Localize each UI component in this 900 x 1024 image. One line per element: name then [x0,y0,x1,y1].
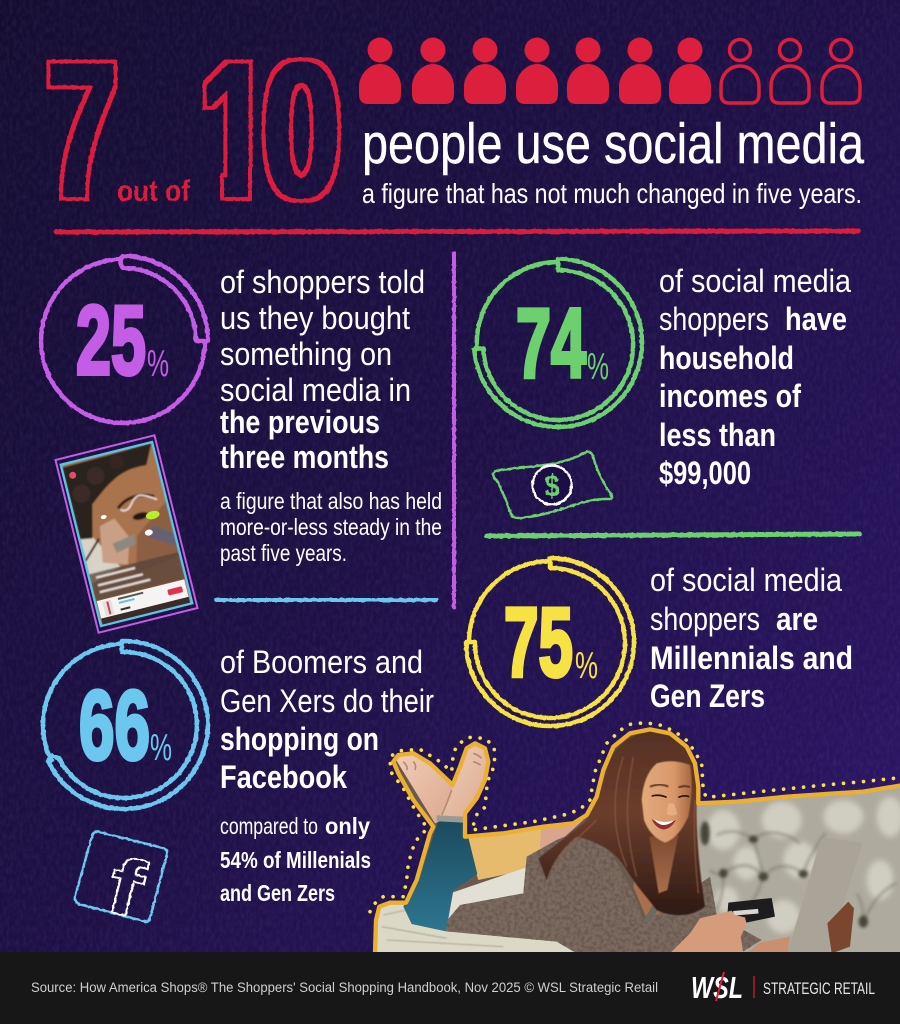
text: steady figure note [220,488,442,566]
legs: jeans [403,820,477,931]
text: household incomes: incomes of [659,378,801,414]
sofa [696,788,900,952]
donut: 66 percent [43,641,208,809]
text: Millennials and Gen Zers: are [776,601,818,637]
text: Boomers and Gen Xers: shopping on [220,721,379,757]
text: comparison note: compared to [220,813,318,839]
text: household incomes: $99,000 [659,455,751,491]
text: Millennials and Gen Zers: of social media [650,562,842,598]
neck skin [649,835,678,893]
text: steady figure note: a figure that also has held [220,488,442,514]
value: 75%: 75 [504,587,573,697]
text: comparison note: and Gen Zers [220,880,335,906]
donut: 25 percent [41,256,208,423]
source line: Source: How America Shops® The Shoppers' Social Shopping Handbook, Nov 2025 © WSL Strategic Retail [31,980,658,995]
icon: dollar bill: $ [544,468,560,503]
panel: 75 percent [466,558,853,726]
decoration: yellow dotted outline [370,723,900,912]
text: shoppers bought: social media in [220,372,411,408]
out of label: out of [117,175,191,208]
text: comparison note: only [325,813,370,839]
text: steady figure note: past five years. [220,540,347,566]
donut: 75 percent [466,558,634,726]
value: 75%: % [575,645,598,687]
donut: 74 percent [474,259,642,427]
value: 66%: % [150,727,172,769]
text: household incomes: of social media [659,263,851,299]
logo: WSL Strategic Retail: WSL [691,970,743,1005]
text: comparison note [220,813,371,906]
tablet [793,838,824,935]
icon: Facebook logo: f [99,841,153,935]
text: comparison note: 54% of Millenials [220,847,371,873]
text: household incomes: shoppers [659,301,769,337]
text: Millennials and Gen Zers [650,562,853,714]
big number 10: 0 [262,22,341,239]
icon: Facebook logo [75,832,167,935]
text: Boomers and Gen Xers [220,644,434,795]
text: Millennials and Gen Zers: shoppers [650,601,760,637]
text: Millennials and Gen Zers: Gen Zers [650,678,765,714]
footer bar [0,952,900,1024]
panel: headline 7 out of 10 [46,38,864,209]
big number 10 [202,57,342,204]
face [642,761,692,843]
text: Boomers and Gen Xers: of Boomers and [220,644,423,680]
photo content [370,720,900,953]
blanket [448,868,526,918]
big number 10: 1 [200,22,270,239]
panel: 66 percent [43,641,434,935]
image: woman shopping on sofa [370,720,900,953]
text: shoppers bought: something on [220,336,392,372]
hands and forearm [670,902,854,953]
icon: dollar bill [493,452,612,518]
text: shoppers bought: of shoppers told [220,264,425,300]
cushion [377,904,574,952]
text: shoppers bought: the previous [220,404,380,440]
value: 25%: 25 [76,285,146,395]
neck and chest [633,880,661,916]
panel: 74 percent [474,259,851,518]
text: shoppers bought [220,264,425,475]
big number 7: 7 [47,22,117,239]
text: steady figure note: more-or-less steady in the [220,514,442,540]
decoration: gold silhouette edge [375,729,900,953]
value: 25%: % [147,343,169,385]
text: Boomers and Gen Xers: Gen Xers do their [220,683,434,719]
value: 74%: 74 [516,288,586,398]
logo: WSL Strategic Retail [691,970,875,1005]
pillow [468,829,542,880]
feet [396,746,486,824]
value: 66%: 66 [79,670,150,780]
text: household incomes: less than [659,417,776,453]
text: household incomes: have [785,301,847,337]
text: household incomes [659,263,851,491]
text: shoppers bought: three months [220,439,389,475]
text: household incomes: household [659,340,794,376]
hair [538,731,705,915]
image: phone live stream [55,435,198,633]
icon row: seven of ten people [359,38,860,104]
value: 74%: % [587,346,609,388]
credit card [727,898,775,925]
text: Millennials and Gen Zers: Millennials and [650,640,853,676]
text: Boomers and Gen Xers: Facebook [220,759,347,795]
text: shoppers bought: us they bought [220,300,410,336]
sweater [446,832,762,953]
panel: 25 percent [41,256,442,633]
